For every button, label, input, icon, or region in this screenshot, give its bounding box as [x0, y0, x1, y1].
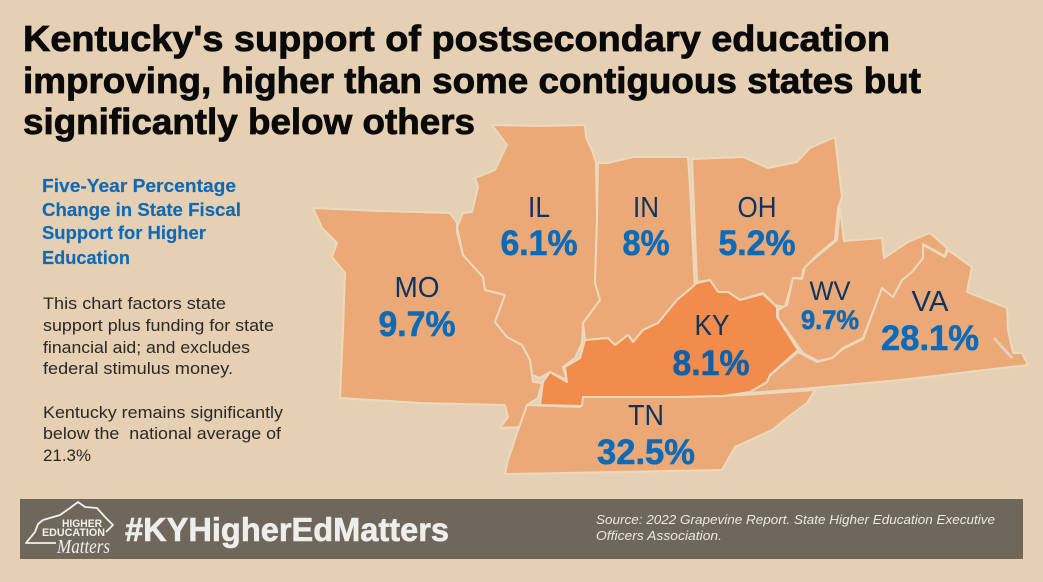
label: IL 6.1%: IL	[528, 192, 550, 224]
label: VA 28.1%: VA	[912, 286, 949, 318]
explanatory text: Kentucky remains significantly	[43, 404, 284, 422]
state: Kentucky	[540, 280, 798, 406]
label: IL 6.1%: 6.1%	[500, 224, 578, 263]
label: VA 28.1%: 28.1%	[881, 319, 979, 358]
label: OH 5.2%: 5.2%	[718, 224, 796, 263]
explanatory text: financial aid; and excludes	[43, 339, 250, 357]
title	[23, 18, 921, 142]
state: Illinois	[457, 125, 600, 380]
chart heading: Change in State Fiscal	[42, 200, 241, 220]
label: TN 32.5%: 32.5%	[597, 433, 695, 472]
label: MO 9.7%: MO	[394, 272, 440, 304]
label: KY 8.1%: 8.1%	[672, 344, 750, 383]
state: West Virginia	[778, 208, 947, 361]
source note: Source: 2022 Grapevine Report. State Higher Education Executive	[596, 512, 995, 527]
footer bar	[20, 499, 1023, 559]
label: MO 9.7%	[378, 272, 456, 344]
state: Ohio	[692, 137, 842, 307]
explanatory text: federal stimulus money.	[43, 360, 233, 378]
label: TN 32.5%: TN	[628, 400, 664, 432]
label: OH 5.2%	[718, 192, 796, 263]
hashtag: #KYHigherEdMatters	[125, 511, 449, 548]
label: MO 9.7%: 9.7%	[378, 305, 456, 344]
chart heading: Support for Higher	[42, 223, 206, 243]
logo: Higher Education Matters	[26, 502, 113, 558]
label: IN 8%	[622, 192, 670, 263]
explanatory text: This chart factors state	[43, 295, 226, 313]
explanatory text: below the national average of	[43, 425, 281, 443]
label: IN 8%: IN	[633, 192, 659, 224]
label: IN 8%: 8%	[622, 224, 670, 263]
logo: Higher Education Matters: HIGHER	[62, 518, 102, 530]
title: improving, higher than some contiguous states but	[23, 60, 921, 101]
label: WV 9.7%: WV	[810, 276, 850, 306]
logo: Higher Education Matters: EDUCATION	[42, 527, 105, 539]
map of Kentucky and contiguous states	[313, 125, 1028, 474]
label: KY 8.1%: KY	[694, 310, 730, 342]
source note: Officers Association.	[596, 528, 722, 543]
label: OH 5.2%: OH	[738, 192, 776, 224]
title: significantly below others	[23, 101, 475, 142]
label: VA 28.1%	[881, 286, 979, 358]
label: WV 9.7%	[801, 276, 859, 335]
label: WV 9.7%: 9.7%	[801, 305, 859, 335]
logo: Higher Education Matters: Matters	[56, 536, 110, 558]
state: Virginia	[750, 245, 1028, 393]
state: Tennessee	[505, 390, 815, 474]
chart heading: Education	[42, 248, 130, 268]
label: KY 8.1%	[672, 310, 750, 383]
chart heading	[42, 176, 241, 268]
chart heading: Five-Year Percentage	[42, 176, 236, 196]
explanatory text	[43, 295, 284, 465]
label: IL 6.1%	[500, 192, 578, 263]
source note	[596, 512, 995, 543]
state: Missouri	[313, 208, 542, 428]
explanatory text: support plus funding for state	[43, 317, 274, 335]
title: Kentucky's support of postsecondary education	[23, 18, 890, 59]
explanatory text: 21.3%	[43, 447, 91, 465]
label: TN 32.5%	[597, 400, 695, 472]
state: Indiana	[583, 157, 695, 345]
